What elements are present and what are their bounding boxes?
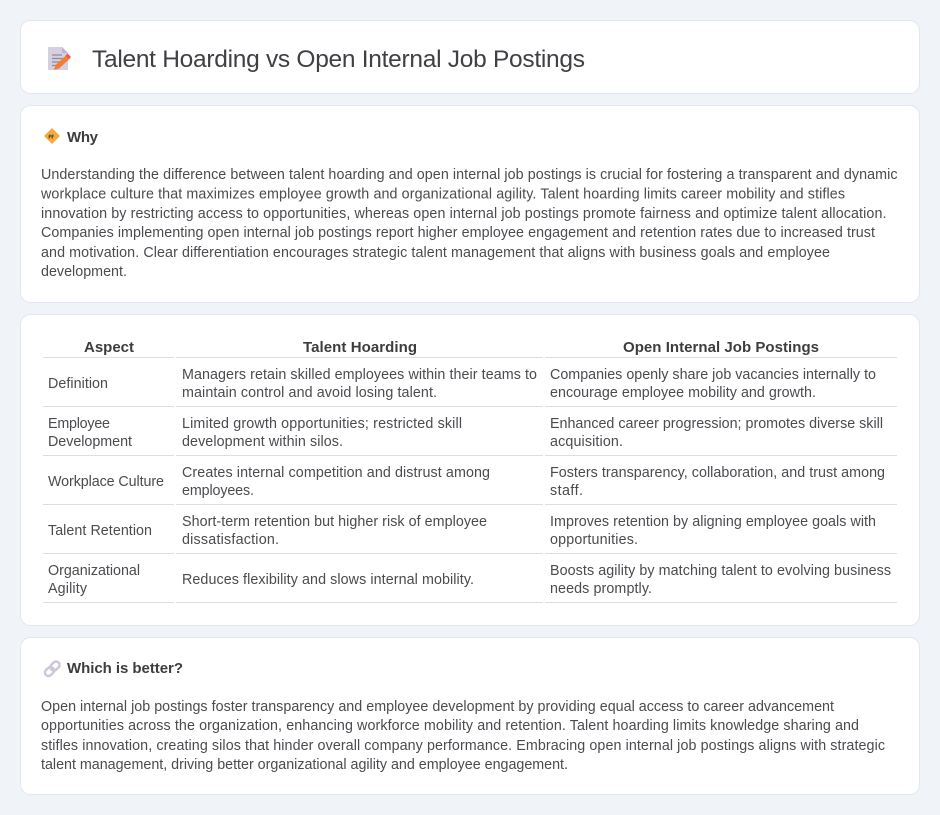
row: organizational agility: Boosts agility by matching talent to evolving business bbox=[550, 563, 891, 579]
row: employee development bbox=[48, 416, 883, 450]
row: talent retention: opportunities. bbox=[550, 532, 638, 548]
panel: why bbox=[20, 106, 920, 302]
row: employee development: development within silos. bbox=[182, 434, 343, 450]
row: talent retention: dissatisfaction. bbox=[182, 532, 279, 548]
title: Talent Hoarding vs Open Internal Job Postings bbox=[92, 46, 585, 73]
row: organizational agility: Reduces flexibility and slows internal mobility. bbox=[182, 572, 474, 588]
row: employee development: acquisition. bbox=[550, 434, 623, 450]
row: workplace culture: Fosters transparency, collaboration, and trust among bbox=[550, 465, 885, 481]
row: workplace culture: Creates internal competition and distrust among bbox=[182, 465, 490, 481]
row: talent retention: Short-term retention but higher risk of employee bbox=[182, 514, 487, 530]
icon: orange diamond bbox=[44, 128, 60, 144]
row: workplace culture: staff. bbox=[550, 483, 583, 499]
table header bbox=[84, 339, 819, 356]
panel: which is better bbox=[20, 638, 920, 794]
row: definition: encourage employee mobility and growth. bbox=[550, 385, 816, 401]
text block: verdict paragraph: talent management, driving better organizational agility and employee engagement. bbox=[41, 757, 568, 773]
text block: verdict paragraph bbox=[41, 699, 885, 773]
heading: why: Why bbox=[67, 129, 99, 146]
text block: why paragraph: and motivation. Clear differentiation encourages strategic talent management that aligns with business goals and employee bbox=[41, 245, 830, 261]
row: talent retention: Improves retention by aligning employee goals with bbox=[550, 514, 876, 530]
text block: why paragraph: innovation by restricting access to opportunities, whereas open internal job postings promote fairness and optimize talent allocation. bbox=[41, 206, 886, 222]
row: organizational agility: Organizational bbox=[48, 563, 140, 579]
row: definition: Companies openly share job vacancies internally to bbox=[550, 367, 876, 383]
row: definition: Managers retain skilled employees within their teams to bbox=[182, 367, 537, 383]
text block: why paragraph: Companies implementing open internal job postings report higher employee engagement and retention rates due to increased trust bbox=[41, 225, 875, 241]
row: employee development: Development bbox=[48, 434, 132, 450]
text block: why paragraph: Understanding the difference between talent hoarding and open internal job postings is crucial for fostering a transparent and dynamic bbox=[41, 167, 898, 183]
row: definition: Definition bbox=[48, 376, 108, 392]
row: organizational agility: Agility bbox=[48, 581, 88, 597]
row: employee development: Enhanced career progression; promotes diverse skill bbox=[550, 416, 883, 432]
text block: why paragraph bbox=[40, 167, 898, 280]
table header: Talent Hoarding bbox=[303, 339, 417, 356]
text block: verdict paragraph: opportunities across the organization, enhancing workforce mobility and retention. Talent hoarding limits knowledge sharing and bbox=[41, 718, 859, 734]
panel: comparison table bbox=[20, 314, 920, 626]
row: talent retention: Talent Retention bbox=[48, 523, 152, 539]
table header: Aspect bbox=[84, 339, 134, 356]
text block: why paragraph: development. bbox=[41, 264, 127, 280]
row: employee development: Limited growth opportunities; restricted skill bbox=[182, 416, 462, 432]
text block: verdict paragraph: stifles innovation, creating silos that hinder overall company performance. Embracing open internal job postings aligns with strategic bbox=[41, 738, 885, 754]
row: workplace culture bbox=[48, 465, 885, 499]
icon: memo and pencil bbox=[48, 47, 71, 70]
row: workplace culture: employees. bbox=[182, 483, 254, 499]
row: organizational agility bbox=[48, 563, 891, 597]
panel: header bbox=[20, 20, 920, 94]
icon: link bbox=[43, 660, 61, 678]
row: talent retention bbox=[48, 514, 876, 548]
row: workplace culture: Workplace Culture bbox=[48, 474, 164, 490]
row: definition: maintain control and avoid losing talent. bbox=[182, 385, 437, 401]
heading: which is better: Which is better? bbox=[67, 660, 183, 677]
row: definition bbox=[48, 367, 876, 401]
row: employee development: Employee bbox=[48, 416, 110, 432]
text block: verdict paragraph: Open internal job postings foster transparency and employee development by providing equal access to career advancement bbox=[41, 699, 834, 715]
text block: why paragraph: workplace culture that maximizes employee growth and organizational agility. Talent hoarding limits career mobility and stifles bbox=[40, 186, 845, 202]
table header: Open Internal Job Postings bbox=[623, 339, 819, 356]
row: organizational agility: needs promptly. bbox=[550, 581, 652, 597]
